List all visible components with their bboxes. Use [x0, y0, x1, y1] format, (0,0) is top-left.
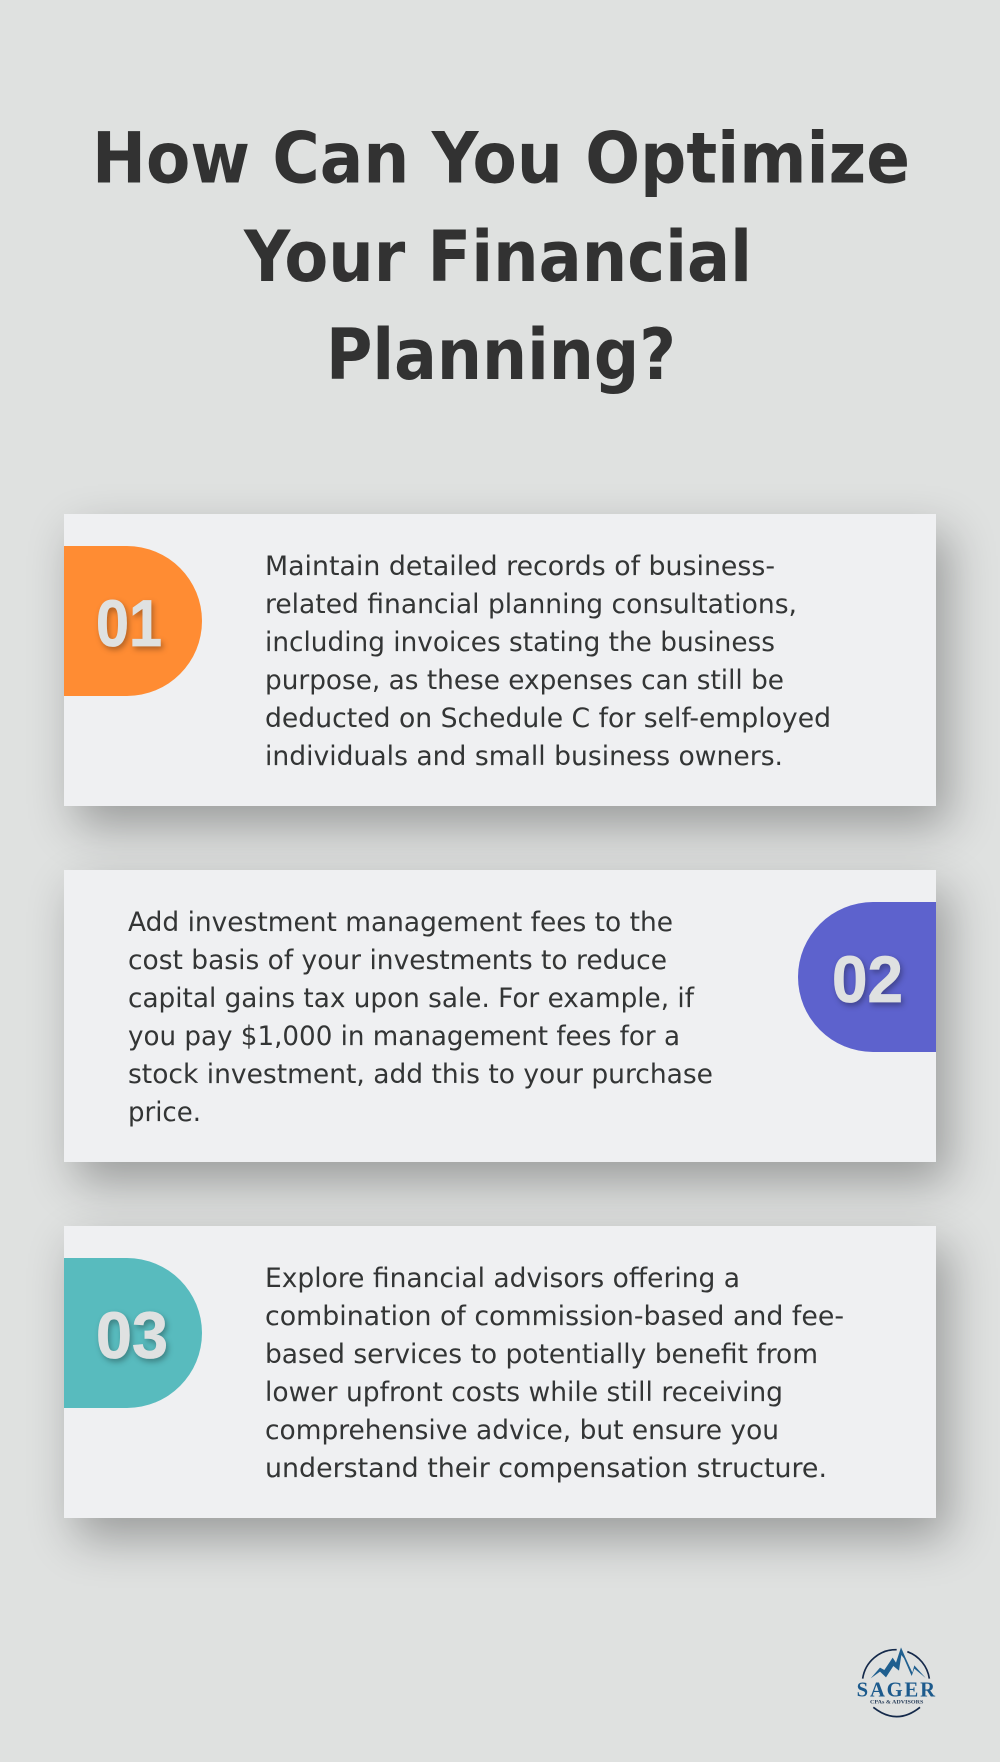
badge: 01: [64, 546, 202, 696]
badge: 02: 02: [832, 942, 903, 1016]
logo: Sager CPAs & Advisors: [857, 1648, 936, 1718]
text: step 03 description: combination of commission-based and fee-: [265, 1301, 844, 1332]
text: step 03 description: [265, 1263, 844, 1484]
text: step 02 description: stock investment, add this to your purchase: [128, 1059, 713, 1090]
title: How Can You Optimize: [92, 118, 910, 200]
text: step 03 description: based services to potentially benefit from: [265, 1339, 818, 1370]
panel: step 03: [64, 1226, 936, 1518]
logo: Sager CPAs & Advisors: SAGER: [857, 1680, 936, 1702]
text: step 01 description: Maintain detailed records of business-: [265, 551, 775, 582]
text: step 03 description: Explore financial advisors offering a: [265, 1263, 740, 1294]
text: step 01 description: purpose, as these expenses can still be: [265, 665, 784, 696]
text: step 02 description: cost basis of your investments to reduce: [128, 945, 667, 976]
text: step 03 description: understand their compensation structure.: [265, 1453, 827, 1484]
title: [92, 118, 910, 396]
panel: step 02: [64, 870, 936, 1162]
text: step 02 description: capital gains tax upon sale. For example, if: [128, 983, 695, 1014]
text: step 02 description: price.: [128, 1097, 201, 1128]
badge: 02: [798, 902, 936, 1052]
panel: step 01: [64, 514, 936, 806]
text: step 01 description: individuals and small business owners.: [265, 741, 783, 772]
text: step 02 description: Add investment management fees to the: [128, 907, 673, 938]
text: step 02 description: [128, 907, 713, 1128]
text: step 02 description: you pay $1,000 in management fees for a: [128, 1021, 680, 1052]
text: step 01 description: deducted on Schedule C for self-employed: [265, 703, 831, 734]
badge: 03: 03: [96, 1298, 168, 1372]
text: step 01 description: [265, 551, 831, 772]
text: step 03 description: lower upfront costs while still receiving: [265, 1377, 783, 1408]
badge: 01: 01: [96, 586, 162, 660]
title: Your Financial: [243, 216, 752, 298]
text: step 01 description: including invoices stating the business: [265, 627, 775, 658]
text: step 01 description: related financial planning consultations,: [265, 589, 797, 620]
badge: 03: [64, 1258, 202, 1408]
text: step 03 description: comprehensive advice, but ensure you: [265, 1415, 779, 1446]
logo: Sager CPAs & Advisors: CPAs & ADVISORS: [870, 1700, 924, 1705]
title: Planning?: [326, 314, 676, 396]
